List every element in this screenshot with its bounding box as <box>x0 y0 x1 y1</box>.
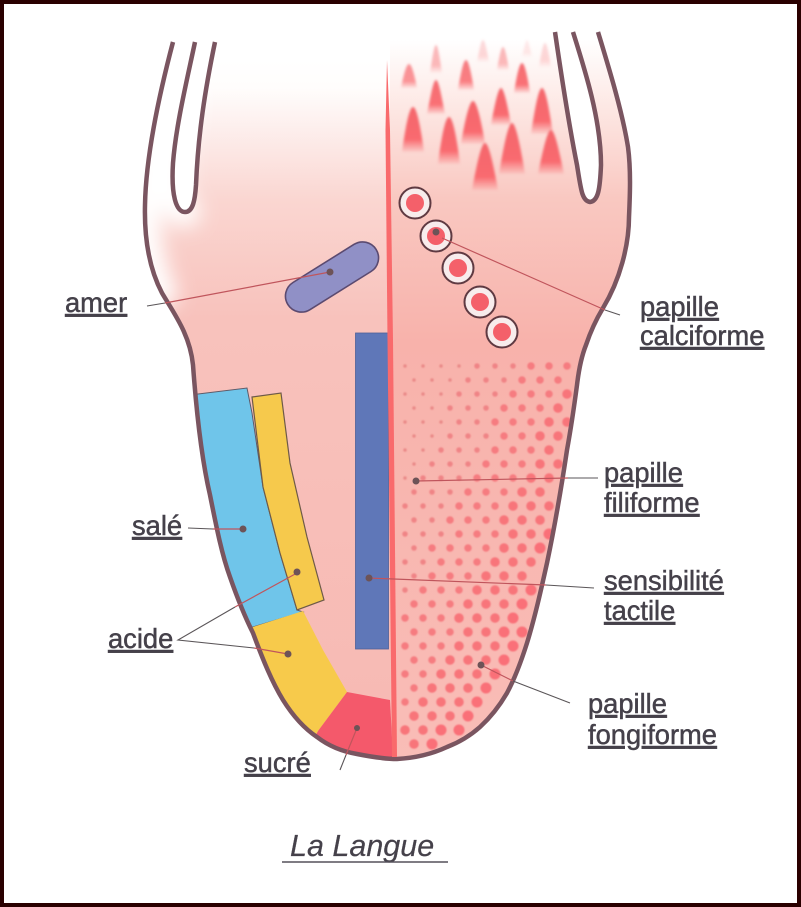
label: acide: acide <box>108 623 173 654</box>
leader lines and anchor dots <box>147 228 620 770</box>
label: papille filiforme: filiforme <box>604 487 700 518</box>
label: sucré: sucré <box>244 747 311 778</box>
right fold slit <box>555 32 601 202</box>
label: papille calciforme: papille <box>640 291 719 322</box>
label: salé: salé <box>132 510 182 541</box>
salé zone <box>198 388 304 628</box>
left fold slit <box>173 42 215 212</box>
label: sensibilité tactile: tactile <box>604 595 675 626</box>
papilles fongiformes et filiformes: dots <box>405 366 567 744</box>
label: papille filiforme: papille <box>604 457 683 488</box>
title: La Langue <box>290 829 434 863</box>
label: papille fongiforme: fongiforme <box>588 719 717 750</box>
label: papille calciforme: calciforme <box>640 320 764 351</box>
label: sensibilité tactile: sensibilité <box>604 565 724 596</box>
acide zone, lower <box>252 611 347 734</box>
tongue body <box>151 60 628 757</box>
papilles caliciformes: circles <box>400 188 518 348</box>
sucré zone <box>316 692 392 757</box>
label: papille fongiforme: papille <box>588 688 667 719</box>
papilles caliciformes: cones <box>401 40 564 190</box>
median line <box>386 60 397 757</box>
label: amer: amer <box>65 287 127 318</box>
sensibilité tactile bar <box>356 333 388 649</box>
tongue outline <box>145 32 630 759</box>
acide zone, upper <box>252 393 324 610</box>
amer zone <box>279 236 385 318</box>
